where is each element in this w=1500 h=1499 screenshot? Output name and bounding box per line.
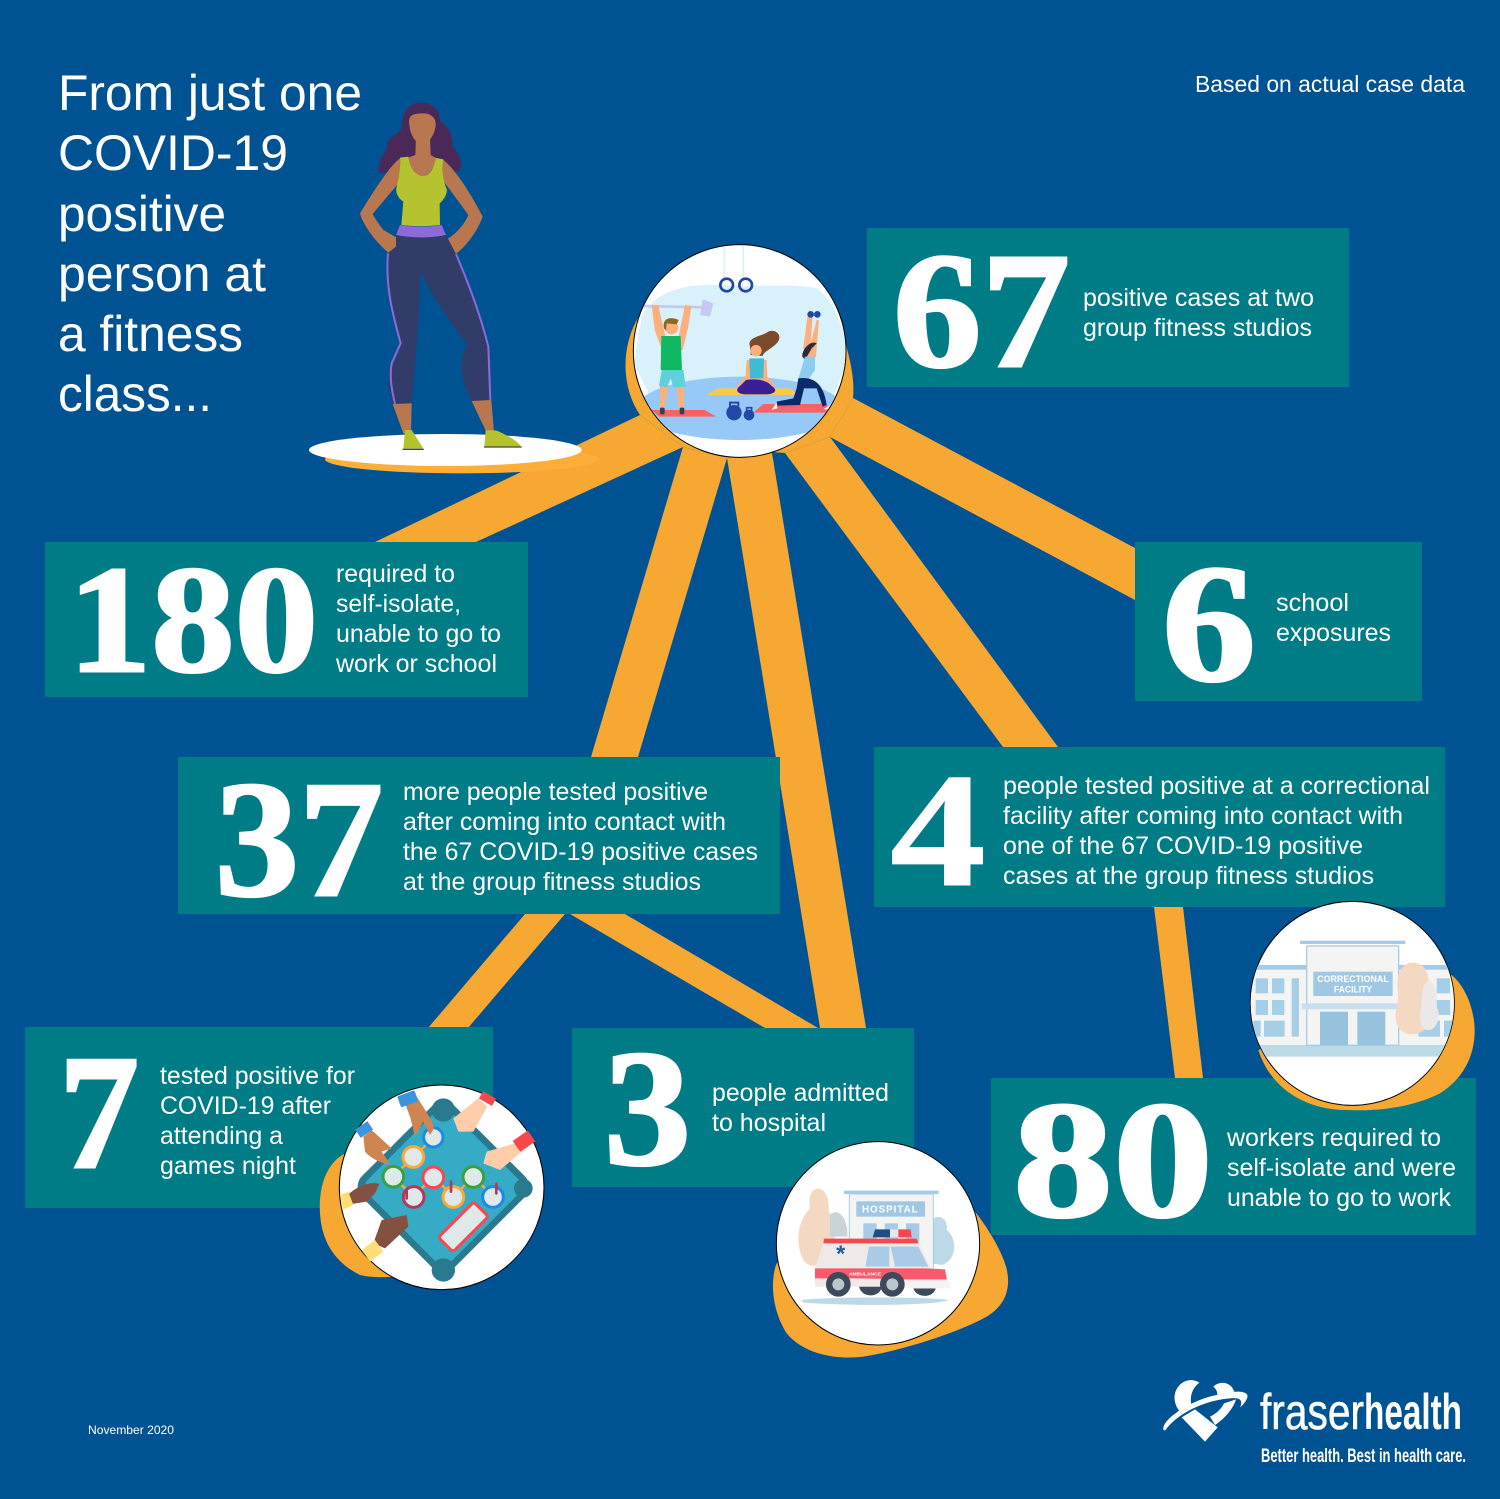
panel: 180: required to xyxy=(336,560,455,588)
orange blob xyxy=(773,1212,1008,1357)
windows xyxy=(1253,978,1454,1037)
trees xyxy=(1395,963,1433,1034)
panel: 180 xyxy=(45,536,528,705)
ray to 6 xyxy=(830,398,1135,600)
icon: hospital circle: * xyxy=(836,1241,846,1267)
panel: 4: 4 xyxy=(890,741,986,921)
trees xyxy=(798,1189,835,1266)
panel: 180: unable to go to xyxy=(336,620,501,648)
ray to 180 xyxy=(375,415,683,542)
title: class... xyxy=(58,366,212,422)
panel: 7: games night xyxy=(160,1152,296,1180)
waistband xyxy=(396,225,446,237)
legging stripes xyxy=(387,253,490,404)
ground xyxy=(1253,1045,1453,1057)
ray 37 to 7 xyxy=(428,914,565,1028)
panel: 7: 7 xyxy=(59,1023,139,1203)
barbell xyxy=(643,306,703,307)
yoga woman xyxy=(750,331,779,356)
ray 4 to 80 xyxy=(1154,907,1203,1078)
panel: 7: tested positive for xyxy=(160,1062,355,1090)
hands xyxy=(405,1097,434,1137)
panel: 37: the 67 COVID-19 positive cases xyxy=(403,838,758,866)
panel: 80: workers required to xyxy=(1226,1124,1441,1152)
date: November 2020 xyxy=(88,1423,174,1437)
panel: 4 xyxy=(874,741,1445,921)
ambulance xyxy=(802,1297,948,1305)
title: a fitness xyxy=(58,306,243,362)
ray to 37 xyxy=(591,447,727,757)
panel: 67: positive cases at two xyxy=(1083,284,1314,312)
logo: Fraser Health: fraser xyxy=(1260,1384,1364,1440)
rings xyxy=(724,245,743,278)
panel: 37: at the group fitness studios xyxy=(403,868,701,896)
icon: correctional facility circle xyxy=(1250,901,1475,1110)
panel: 3: 3 xyxy=(604,1016,691,1200)
panel: 180: work or school xyxy=(335,650,497,678)
panel: 67 xyxy=(867,219,1349,402)
shoes xyxy=(403,430,521,448)
leggings xyxy=(386,235,491,404)
title: From just one xyxy=(58,65,362,121)
game spaces xyxy=(383,1128,503,1252)
panel: 3 xyxy=(572,1016,914,1200)
icon: heart and swoosh xyxy=(1163,1380,1247,1442)
panel: 37: 37 xyxy=(215,747,383,931)
backdrop xyxy=(634,285,847,397)
central block xyxy=(1300,941,1405,944)
game board xyxy=(351,1095,535,1279)
floor xyxy=(637,377,843,440)
orange blob xyxy=(320,1154,410,1277)
panel: 4: one of the 67 COVID-19 positive xyxy=(1003,832,1363,860)
panel: 7: attending a xyxy=(160,1122,283,1150)
panel: 3: people admitted xyxy=(712,1079,889,1107)
panel: 80 xyxy=(991,1068,1476,1253)
panel: 37: after coming into contact with xyxy=(403,808,726,836)
kettlebells xyxy=(726,405,742,420)
hair xyxy=(378,103,461,173)
title: person at xyxy=(58,246,266,302)
panel: 7 xyxy=(25,1023,493,1208)
disc xyxy=(309,434,598,473)
panel: 6: exposures xyxy=(1276,619,1391,647)
panel: 180: 180 xyxy=(68,536,318,705)
logo: Fraser Health xyxy=(1163,1380,1466,1467)
panel: 7: COVID-19 after xyxy=(160,1092,331,1120)
icon: correctional facility circle: CORRECTIONAL xyxy=(1317,974,1389,984)
title: positive xyxy=(58,186,226,242)
illustration: standing woman on disc xyxy=(309,103,598,473)
wings xyxy=(1250,965,1307,1045)
icon: hospital circle: HOSPITAL xyxy=(862,1205,919,1216)
lunging woman xyxy=(803,316,819,358)
building xyxy=(844,1191,939,1194)
icon: hospital circle xyxy=(773,1142,1008,1357)
source note: Based on actual case data xyxy=(1195,71,1465,97)
ray 37 to 3 xyxy=(570,914,818,1028)
body skin xyxy=(360,158,483,257)
connector rays xyxy=(375,300,1203,1078)
icon: hospital circle: AMBULANCE xyxy=(849,1271,882,1277)
panel: 4: people tested positive at a correctional xyxy=(1003,772,1430,800)
panel: 80: 80 xyxy=(1013,1068,1213,1253)
orange blob behind gym circle xyxy=(626,300,853,458)
calves xyxy=(393,400,494,433)
panel: 80: unable to go to work xyxy=(1227,1184,1451,1212)
panel: 67: group fitness studios xyxy=(1083,314,1312,342)
icon: gym circle xyxy=(633,245,847,457)
icon: correctional facility circle: FACILITY xyxy=(1334,985,1372,995)
panel: 4: facility after coming into contact with xyxy=(1003,802,1403,830)
panel: 37 xyxy=(178,747,780,931)
man xyxy=(652,305,691,350)
panel: 6: 6 xyxy=(1162,531,1256,717)
panel: 3: to hospital xyxy=(712,1109,826,1137)
orange blob xyxy=(1258,975,1475,1110)
panel: 67: 67 xyxy=(893,219,1070,402)
panel: 180: self-isolate, xyxy=(336,590,461,618)
game pieces xyxy=(407,1182,496,1198)
icon: game night circle xyxy=(320,1085,544,1290)
ray to 4 xyxy=(785,437,1058,747)
ray to 3 xyxy=(727,453,866,1028)
panel: 6: school xyxy=(1276,589,1349,617)
panel: 37: more people tested positive xyxy=(403,778,708,806)
panel: 6 xyxy=(1135,531,1422,717)
title: COVID-19 xyxy=(58,125,288,181)
panel: 4: cases at the group fitness studios xyxy=(1003,862,1374,890)
mats xyxy=(652,410,716,417)
panel: 80: self-isolate and were xyxy=(1227,1154,1456,1182)
tank top xyxy=(396,157,447,226)
